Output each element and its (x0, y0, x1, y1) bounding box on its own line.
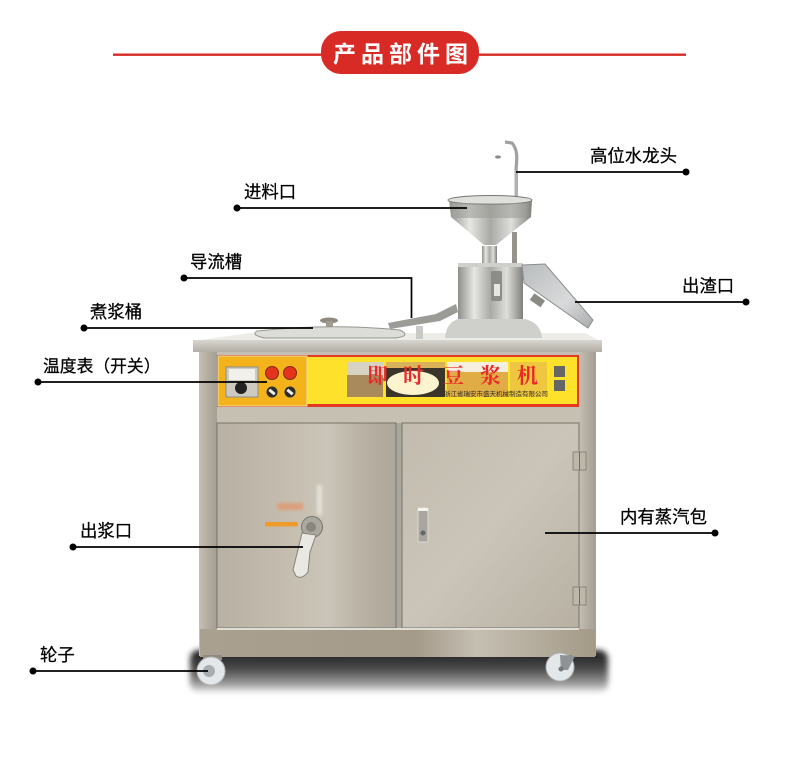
heading: 产品部件图 (113, 31, 686, 74)
table top surface (193, 333, 600, 341)
callout: 高位水龙头: 高位水龙头 (590, 146, 677, 166)
casters (197, 653, 575, 685)
right door (402, 423, 586, 628)
switch plate (218, 356, 307, 406)
residue outlet cover (522, 264, 593, 328)
diversion chute (388, 304, 458, 339)
table top edge (193, 340, 602, 352)
floor shadow (190, 650, 608, 692)
control panel (217, 355, 579, 407)
water faucet (495, 142, 518, 268)
callout: 出浆口: 出浆口 (80, 521, 132, 541)
callout: 温度表（开关） (34, 357, 267, 386)
feed hopper (448, 196, 532, 265)
callout: 导流槽: 导流槽 (190, 252, 242, 272)
boiling pot lid (255, 318, 405, 338)
hinges (573, 452, 586, 605)
callout: 高位水龙头 (516, 146, 690, 176)
callout: 导流槽 (180, 252, 412, 318)
grinder body (445, 263, 542, 338)
stainless cabinet frame (199, 350, 596, 656)
callout: 内有蒸汽包: 内有蒸汽包 (620, 507, 707, 527)
callout: 煮浆桶 (80, 302, 313, 332)
callout: 出浆口 (70, 521, 303, 550)
callout: 内有蒸汽包 (545, 507, 718, 536)
bottom rail (200, 628, 595, 657)
door latch (418, 508, 428, 542)
callout: 出渣口 (575, 276, 750, 306)
callout: 轮子 (30, 645, 208, 674)
callout: 出渣口: 出渣口 (682, 276, 734, 296)
callout: 轮子: 轮子 (40, 645, 75, 665)
machine illustration (190, 142, 608, 692)
callout: 进料口: 进料口 (244, 182, 296, 202)
callout: 进料口 (234, 182, 467, 212)
heading: 产品部件图: 产品部件图 (333, 41, 473, 67)
outlet valve (265, 485, 322, 577)
brand banner: 即时豆浆机 (367, 364, 538, 388)
callout: 温度表（开关）: 温度表（开关） (43, 357, 160, 376)
brand banner: 浙江省瑞安市盛天机械制造有限公司 (444, 389, 548, 398)
callout: 煮浆桶: 煮浆桶 (90, 302, 142, 322)
left door (217, 423, 396, 628)
brand banner (347, 362, 565, 398)
